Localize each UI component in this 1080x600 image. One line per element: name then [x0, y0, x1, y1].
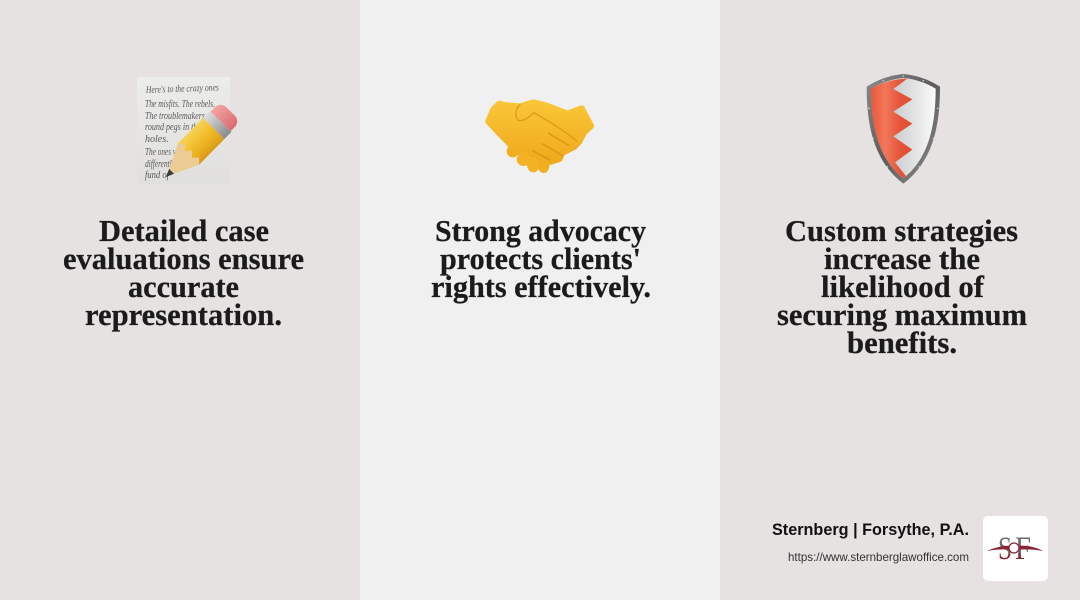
icon: firm logo [983, 516, 1048, 581]
heading: strong advocacy: protects clients' [440, 241, 641, 276]
icon: shield [867, 74, 940, 184]
panel: left background [0, 0, 360, 600]
heading: strong advocacy [431, 213, 651, 304]
panel: middle background [360, 0, 720, 600]
heading: detailed case evaluations: accurate [128, 269, 239, 304]
text: website url: https://www.sternberglawoffice.com [788, 550, 969, 564]
icon: memo with pencil: Here's to the crazy ones [145, 82, 219, 96]
icon: handshake [489, 103, 591, 173]
heading: custom strategies: benefits. [847, 325, 957, 360]
icon: firm logo: F [1015, 531, 1031, 567]
icon: memo with pencil: The misfits. The rebels. [145, 99, 215, 110]
heading: detailed case evaluations: Detailed case [99, 213, 269, 248]
heading: detailed case evaluations [63, 213, 304, 332]
icon: memo with pencil: fund of [145, 170, 170, 181]
icon: memo with pencil: The ones who [145, 147, 185, 158]
heading: custom strategies: Custom strategies [785, 213, 1018, 248]
panel: right background [720, 0, 1080, 600]
text: firm name: Sternberg | Forsythe, P.A. [772, 521, 969, 539]
heading: strong advocacy: rights effectively. [431, 269, 651, 304]
icon: memo with pencil: differently [145, 159, 175, 170]
icon: firm logo: S [998, 531, 1012, 567]
icon: memo with pencil [137, 77, 241, 188]
heading: detailed case evaluations: representation. [85, 297, 282, 332]
icon: memo with pencil: The troublemakers. The [145, 111, 221, 122]
heading: custom strategies: likelihood of [821, 269, 985, 304]
heading: custom strategies: increase the [824, 241, 980, 276]
heading: detailed case evaluations: evaluations ensure [63, 241, 304, 276]
icon: memo with pencil: holes. [145, 134, 169, 145]
heading: custom strategies: securing maximum [777, 297, 1027, 332]
heading: custom strategies [777, 213, 1027, 360]
heading: strong advocacy: Strong advocacy [435, 213, 646, 248]
icon: memo with pencil: round pegs in the [145, 122, 201, 133]
